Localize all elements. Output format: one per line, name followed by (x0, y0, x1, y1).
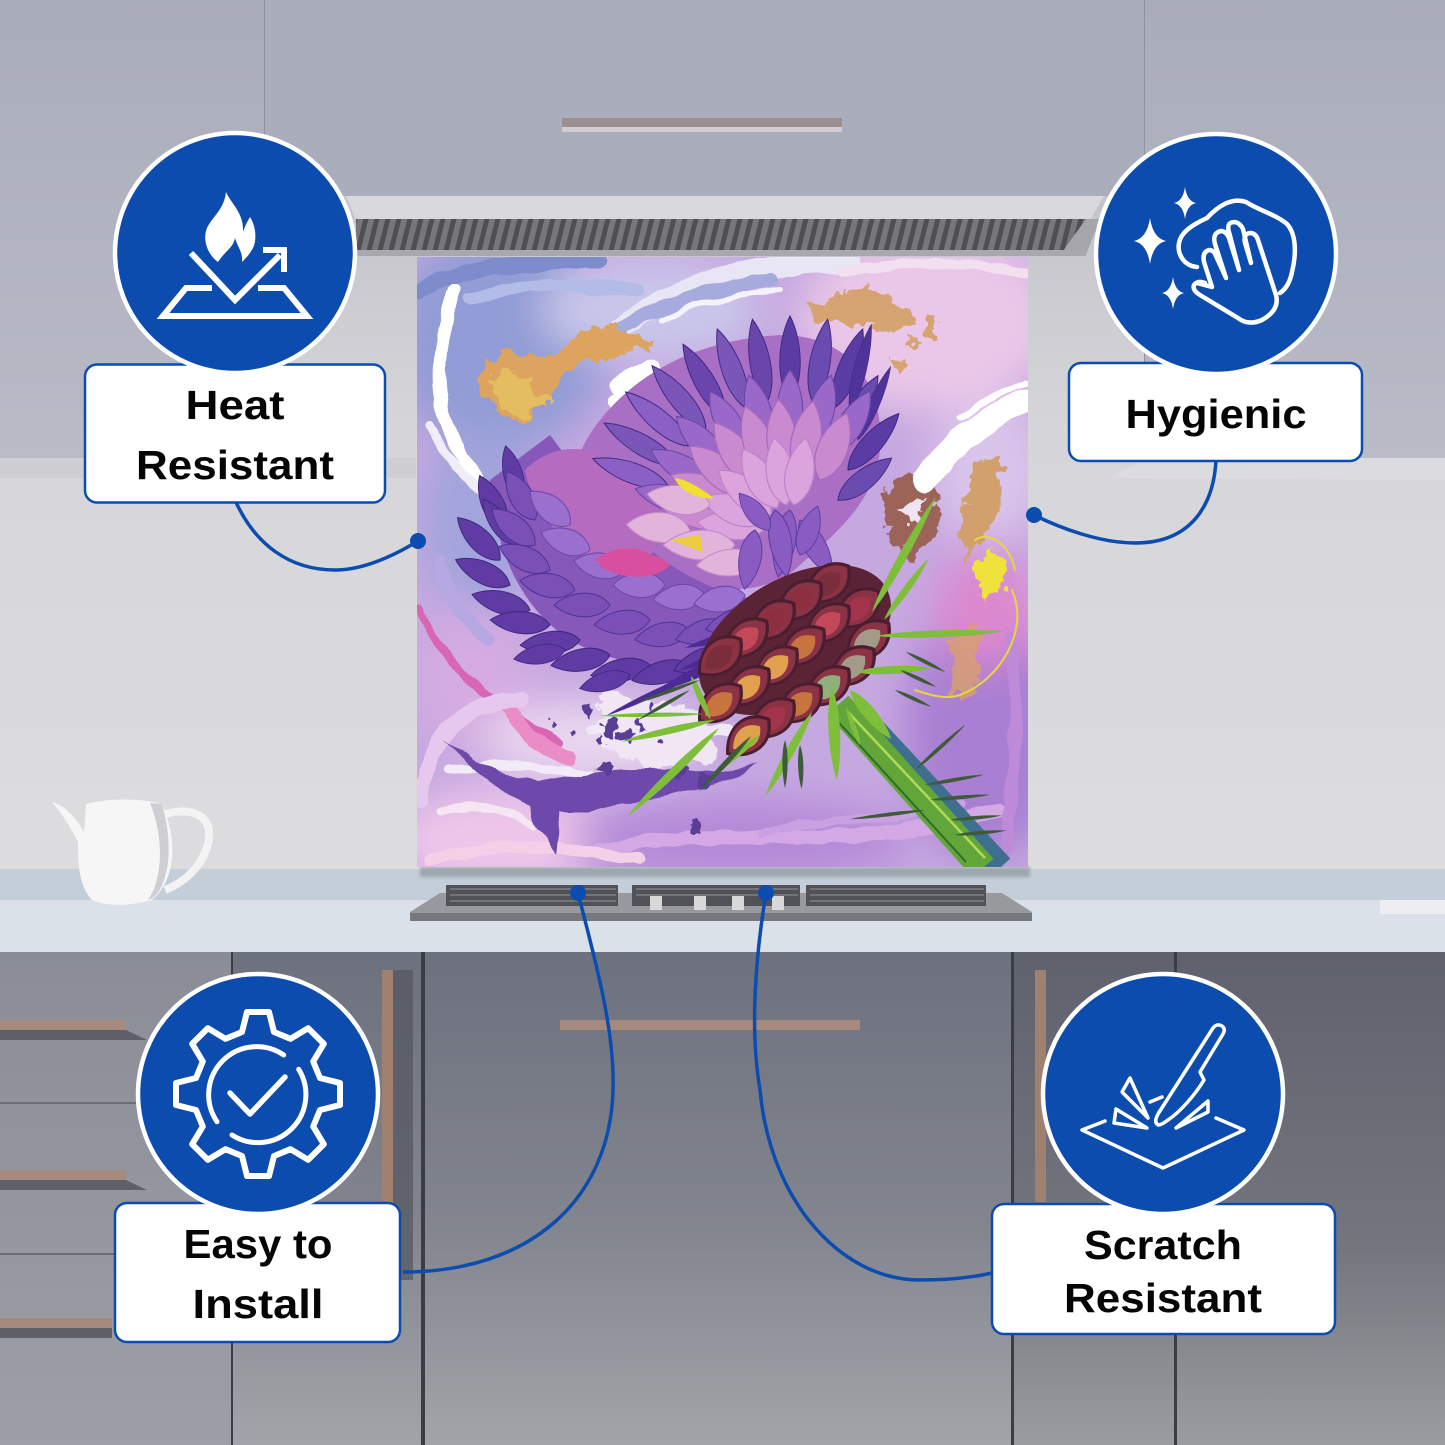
green spikes (599, 495, 1004, 820)
upper cabinets (0, 0, 1445, 480)
thistle flower head (450, 316, 906, 719)
badge: easy to install (115, 974, 400, 1342)
icon: flame over surface with deflecting arrow (163, 192, 307, 316)
label box (85, 364, 385, 502)
label box (1069, 363, 1362, 461)
icon: gear with check mark (176, 1012, 340, 1176)
label text: Heat (186, 382, 285, 428)
stem (832, 705, 1000, 868)
dark paint flecks (552, 701, 708, 834)
badge: heat resistant (85, 133, 385, 502)
painted colour field (417, 257, 1028, 867)
label text: Hygienic (1126, 391, 1306, 437)
cooker hood (346, 196, 1104, 256)
lower left bract rows (454, 445, 705, 692)
dark thistle spines (635, 650, 1007, 837)
connector: scratch resistant to hob (755, 885, 992, 1280)
label box (992, 1204, 1335, 1334)
icon: wiping hand with sparkles (1134, 187, 1295, 323)
badge: scratch resistant (992, 974, 1335, 1334)
lower cabinets (0, 952, 1445, 1445)
pink inner petals (661, 398, 851, 528)
label text second line: Resistant (1064, 1275, 1262, 1321)
thistle seed pod (698, 562, 891, 756)
connector: heat resistant to panel (235, 500, 426, 570)
gold leaf splashes (478, 288, 1010, 770)
pale pink left petals (626, 484, 740, 576)
blue circle (1096, 134, 1336, 374)
brush strokes in the background (420, 262, 1025, 860)
badge: hygienic (1069, 134, 1362, 461)
label text: Scratch (1084, 1222, 1242, 1268)
white teapot (52, 800, 209, 905)
label box (115, 1203, 400, 1342)
white impasto swirls (425, 284, 1028, 495)
connector: easy to install to hob (403, 885, 613, 1272)
label text second line: Install (192, 1281, 324, 1327)
label text second line: Resistant (136, 442, 334, 488)
yellow drip accents (915, 537, 1017, 697)
connector: hygienic to panel (1026, 460, 1216, 543)
central purple knot (738, 492, 832, 590)
blue circle (1043, 974, 1283, 1214)
worktop (0, 867, 1445, 952)
yellow highlights (675, 478, 714, 498)
gas hob (410, 885, 1032, 921)
outer head bracts (589, 316, 906, 508)
purple sweep at the bottom (445, 740, 760, 855)
blue circle (138, 974, 378, 1214)
blue circle (115, 133, 355, 373)
label text: Easy to (184, 1221, 332, 1267)
panel: thistle painting splashback (417, 257, 1028, 867)
icon: knife scratching a surface (1082, 1025, 1244, 1168)
